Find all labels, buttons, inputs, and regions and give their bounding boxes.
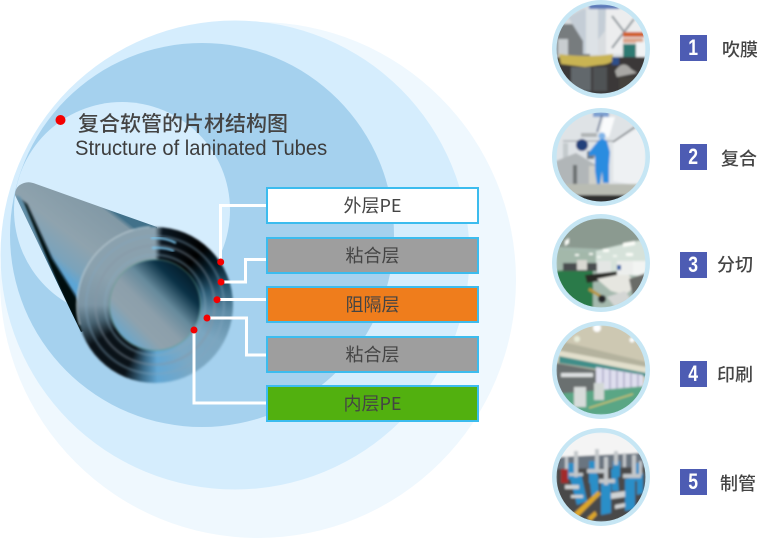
step 2 label: 复合: [721, 145, 757, 171]
layer box: inner PE: [266, 385, 479, 422]
step 1 number: [680, 35, 707, 61]
connector lines: [194, 206, 266, 403]
step 3 number: [680, 252, 707, 278]
thumbnail 5: tube making line: [552, 428, 650, 526]
layer box: barrier: [266, 286, 479, 323]
step 4 number: [680, 361, 707, 387]
layer box: adhesive 1: [266, 237, 479, 274]
title: English: Structure of laninated Tubes: [75, 137, 327, 160]
step 1 number: 1: [689, 35, 698, 60]
red marker dots: [190, 258, 224, 334]
background: palest circle: [0, 22, 516, 538]
step 4 number: 4: [689, 361, 698, 386]
layer box: adhesive 2: [266, 336, 479, 373]
layer box: adhesive 2: 粘合层: [346, 341, 400, 367]
step 5 number: [680, 469, 707, 495]
thumbnail 3: slitting workshop: [552, 214, 650, 312]
step 3 label: 分切: [717, 251, 753, 277]
light outer rim arc: [77, 227, 150, 325]
layer box: inner PE: 内层PE: [344, 390, 402, 416]
layer box: adhesive 1: 粘合层: [346, 242, 400, 268]
step 3 number: 3: [689, 252, 698, 277]
tube illustration: [15, 182, 234, 384]
thumbnail 2: lamination room: [552, 108, 650, 206]
thumbnail 4: printing press: [552, 321, 650, 419]
blue highlights on black bands: [151, 238, 176, 251]
step 2 number: [680, 144, 707, 170]
background: inner light circle: [14, 102, 230, 318]
step 1 label: 吹膜: [722, 36, 758, 62]
title bullet: [56, 115, 66, 125]
layer box: barrier: 阻隔层: [346, 291, 400, 317]
step 2 number: 2: [689, 144, 698, 169]
layer box: outer PE: 外层PE: [344, 192, 402, 218]
step 4 label: 印刷: [717, 361, 753, 387]
thumbnail 1: film blowing: [552, 0, 650, 98]
background: dark blue circle: [10, 43, 394, 427]
background: middle circle: [0, 20, 470, 490]
step 5 label: 制管: [720, 470, 756, 496]
layer box: outer PE: [266, 187, 479, 224]
step 5 number: 5: [689, 469, 698, 494]
title: Chinese: 复合软管的片材结构图: [78, 108, 288, 138]
